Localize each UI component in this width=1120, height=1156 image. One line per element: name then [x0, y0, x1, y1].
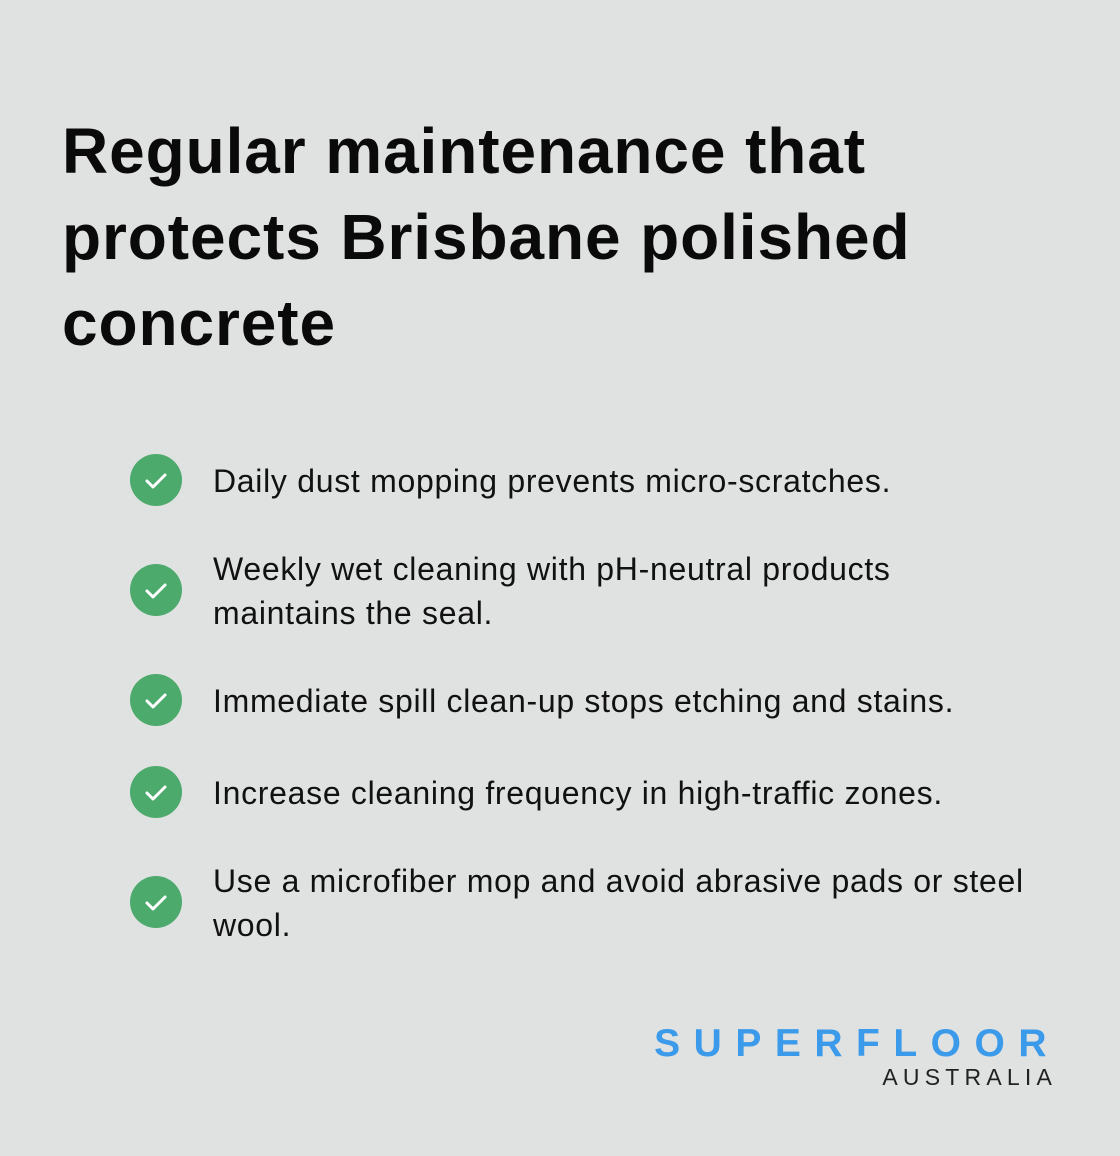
text: maintains the seal. — [213, 595, 493, 631]
item 1 — [130, 454, 891, 506]
icon: check — [130, 766, 182, 818]
icon: check — [130, 674, 182, 726]
text: Use a microfiber mop and avoid abrasive pads or steel — [213, 863, 1024, 899]
text — [213, 551, 891, 631]
icon: check — [130, 564, 182, 616]
text — [213, 863, 1024, 943]
text: Immediate spill clean-up stops etching and stains. — [213, 683, 954, 719]
text: Daily dust mopping prevents micro-scratches. — [213, 463, 891, 499]
title: protects Brisbane polished — [62, 201, 910, 273]
item 5 — [130, 863, 1024, 943]
title: concrete — [62, 287, 336, 359]
text: Increase cleaning frequency in high-traffic zones. — [213, 775, 943, 811]
logo: superfloor: SUPERFLOOR — [654, 1022, 1060, 1065]
text: wool. — [213, 907, 291, 943]
item 4 — [130, 766, 943, 818]
item 3 — [130, 674, 954, 726]
item 2 — [130, 551, 891, 631]
icon: check — [130, 876, 182, 928]
text: Weekly wet cleaning with pH-neutral products — [213, 551, 891, 587]
title: Regular maintenance that — [62, 115, 866, 187]
title — [62, 115, 910, 359]
icon: check — [130, 454, 182, 506]
logo: australia: AUSTRALIA — [882, 1064, 1057, 1090]
logo — [654, 1022, 1060, 1090]
